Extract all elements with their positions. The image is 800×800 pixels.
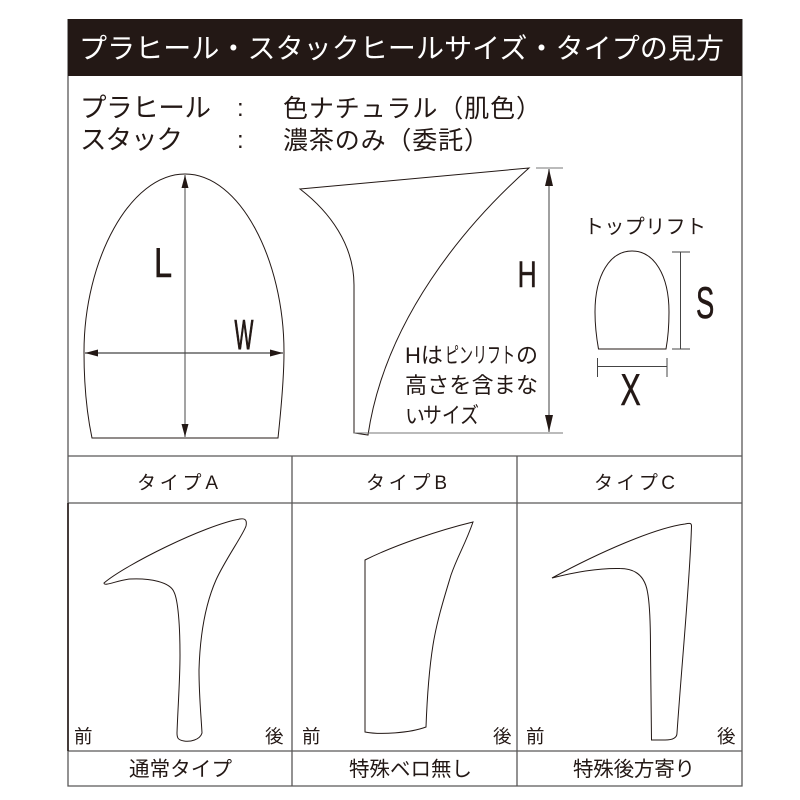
plastic heel colour note: :	[237, 95, 244, 122]
panel: type A	[74, 472, 284, 781]
label: back: 後	[265, 726, 284, 747]
label: front: 前	[526, 726, 545, 747]
panel: type C	[526, 472, 736, 781]
note: H excludes pin lift: サイズ	[423, 403, 479, 428]
plastic heel colour note: プラヒール	[80, 93, 211, 123]
plastic heel colour note: 色ナチュラル（肌色）	[283, 95, 541, 123]
label: S: S	[696, 278, 714, 328]
note: H excludes pin lift	[405, 343, 538, 428]
stack colour note	[80, 125, 489, 155]
label: front: 前	[302, 726, 321, 747]
title banner	[68, 19, 742, 76]
diagram: top lift with S and X	[595, 251, 714, 415]
diagram: heel side view with H	[300, 168, 563, 435]
stack colour note: 濃茶のみ（委託）	[283, 127, 489, 155]
label: H: H	[518, 254, 537, 295]
label: back: 後	[717, 726, 736, 747]
label: top lift: トップリフト	[584, 216, 706, 238]
stack colour note: スタック	[80, 125, 183, 155]
plastic heel colour note	[80, 93, 541, 123]
panel: type B	[302, 472, 512, 781]
note: H excludes pin lift: ピンリフト	[445, 343, 515, 368]
note: H excludes pin lift: の	[516, 343, 538, 368]
label: front: 前	[74, 726, 93, 747]
diagram: heel sole top view with L and W	[84, 174, 284, 438]
label: W: W	[234, 312, 254, 358]
caption: type B: 特殊ベロ無し	[349, 758, 472, 781]
label: L: L	[154, 239, 172, 286]
label: back: 後	[493, 726, 512, 747]
heading: type A: タイプA	[137, 472, 218, 494]
heel shape B	[365, 522, 473, 733]
stack colour note: :	[237, 127, 244, 154]
note: H excludes pin lift: Hは	[405, 343, 443, 368]
heading: type B: タイプB	[366, 472, 447, 494]
note: H excludes pin lift: 高さを含まな	[405, 373, 538, 398]
caption: type C: 特殊後方寄り	[573, 758, 695, 781]
title banner: プラヒール・スタックヒールサイズ・タイプの見方	[79, 33, 724, 64]
label: X: X	[620, 367, 641, 415]
heel shape C	[552, 523, 692, 740]
heel shape A	[104, 519, 246, 741]
heading: type C: タイプC	[594, 472, 675, 494]
caption: type A: 通常タイプ	[129, 758, 232, 781]
note: H excludes pin lift: い	[405, 406, 425, 428]
